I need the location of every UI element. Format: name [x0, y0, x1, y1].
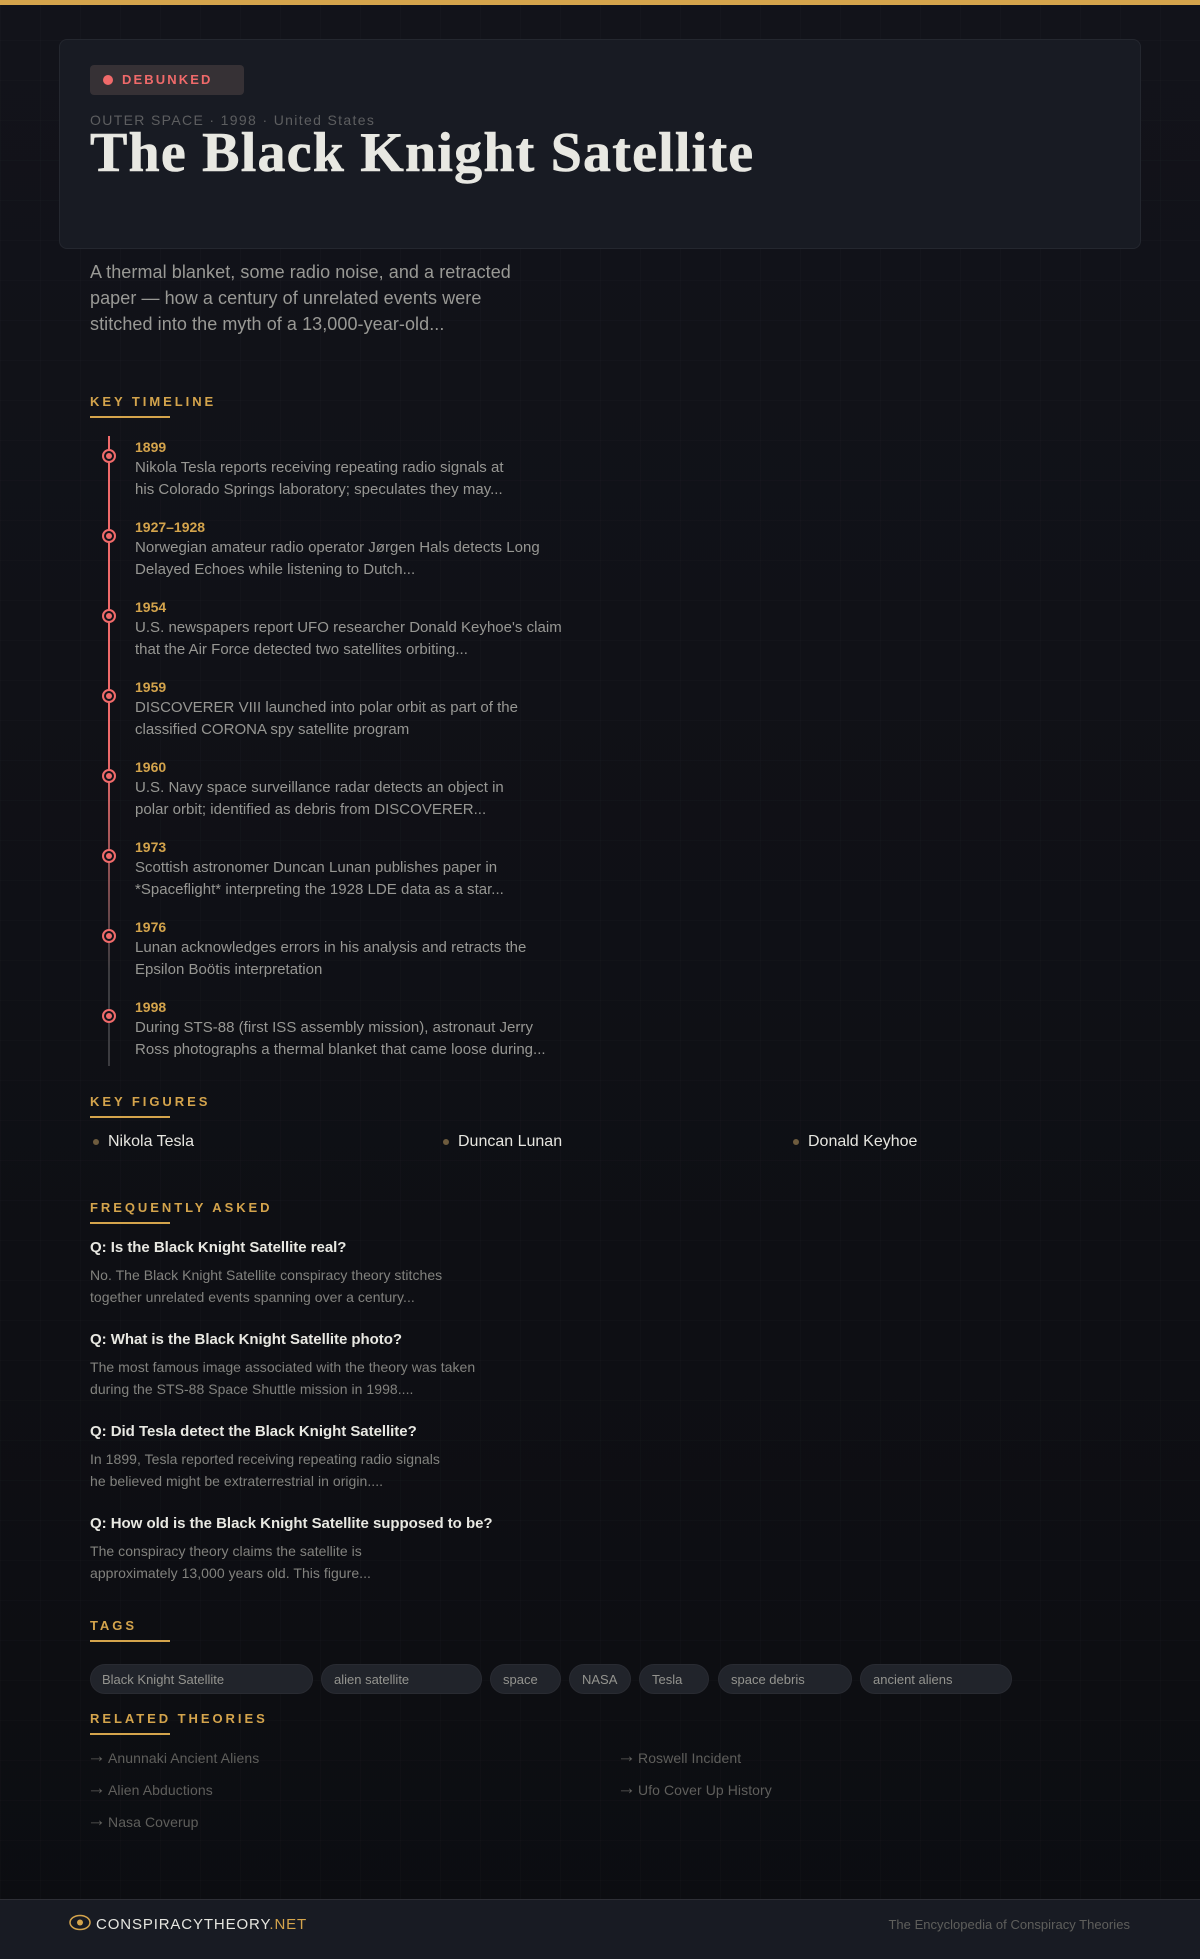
event: 1973: Scottish astronomer Duncan Lunan publishes paper in	[135, 859, 497, 876]
event: 1998: During STS-88 (first ISS assembly mission), astronaut Jerry	[135, 1019, 533, 1036]
icon: status dot	[103, 75, 113, 85]
footer brand: CONSPIRACYTHEORY.NET	[96, 1916, 307, 1933]
footer	[0, 1899, 1200, 1959]
related: Nasa Coverup: →	[87, 1810, 106, 1831]
tag: alien satellite: alien satellite	[334, 1672, 409, 1687]
event: 1927-1928: Norwegian amateur radio operator Jørgen Hals detects Long	[135, 539, 540, 556]
faq item 1	[90, 1239, 442, 1305]
event: 1927-1928: 1927–1928	[135, 519, 205, 535]
event: 1976	[102, 919, 526, 978]
faq item 4: approximately 13,000 years old. This figure...	[90, 1565, 371, 1581]
tag: Tesla: Tesla	[652, 1672, 682, 1687]
event: 1973: *Spaceflight* interpreting the 1928 LDE data as a star...	[135, 881, 504, 898]
faq item 4	[90, 1515, 493, 1581]
event: 1954: that the Air Force detected two satellites orbiting...	[135, 641, 468, 658]
faq item 4: Q: How old is the Black Knight Satellite supposed to be?	[90, 1515, 493, 1532]
tag: Black Knight Satellite	[90, 1664, 313, 1694]
faq item 3: Q: Did Tesla detect the Black Knight Satellite?	[90, 1423, 417, 1440]
event: 1959: classified CORONA spy satellite program	[135, 721, 409, 738]
faq item 3: In 1899, Tesla reported receiving repeating radio signals	[90, 1451, 440, 1467]
faq item 2	[90, 1331, 475, 1397]
tag: alien satellite	[321, 1664, 482, 1694]
related: Alien Abductions: Alien Abductions	[108, 1782, 213, 1798]
footer tagline: The Encyclopedia of Conspiracy Theories	[888, 1917, 1130, 1932]
timeline	[108, 436, 110, 1066]
heading: tags: TAGS	[90, 1618, 137, 1633]
tag: space debris: space debris	[731, 1672, 805, 1687]
related: Roswell Incident: →	[617, 1746, 636, 1767]
related: Ufo Cover Up History: Ufo Cover Up History	[638, 1782, 772, 1798]
faq item 1: Q: Is the Black Knight Satellite real?	[90, 1239, 346, 1256]
faq item 2: during the STS-88 Space Shuttle mission in 1998....	[90, 1381, 413, 1397]
event: 1976: Epsilon Boötis interpretation	[135, 961, 322, 978]
related: Nasa Coverup: Nasa Coverup	[108, 1814, 198, 1830]
event: 1976: Lunan acknowledges errors in his analysis and retracts the	[135, 939, 526, 956]
intro text: stitched into the myth of a 13,000-year-old...	[90, 314, 444, 334]
event: 1899: his Colorado Springs laboratory; speculates they may...	[135, 481, 503, 498]
event: 1954: 1954	[135, 599, 166, 615]
event: 1927-1928	[102, 519, 540, 578]
tag: ancient aliens: ancient aliens	[873, 1672, 952, 1687]
related: Roswell Incident: Roswell Incident	[638, 1750, 741, 1766]
panel: header	[59, 39, 1141, 249]
event: 1973: 1973	[135, 839, 166, 855]
tag: NASA	[569, 1664, 631, 1694]
intro text: A thermal blanket, some radio noise, and a retracted	[90, 262, 511, 282]
related: Ufo Cover Up History: →	[617, 1778, 636, 1799]
event: 1960: 1960	[135, 759, 166, 775]
event: 1960: polar orbit; identified as debris from DISCOVERER...	[135, 801, 486, 818]
intro text: paper — how a century of unrelated events were	[90, 288, 481, 308]
related: Roswell Incident	[617, 1746, 741, 1767]
event: 1954	[102, 599, 562, 658]
event: 1899	[102, 439, 504, 498]
tag: NASA: NASA	[582, 1672, 617, 1687]
tag: space	[490, 1664, 561, 1694]
top accent bar	[0, 0, 1200, 5]
faq item 4: The conspiracy theory claims the satellite is	[90, 1543, 362, 1559]
title: The Black Knight Satellite	[90, 122, 754, 184]
heading: frequently asked: FREQUENTLY ASKED	[90, 1200, 273, 1215]
event: 1998	[102, 999, 546, 1058]
event: 1899: Nikola Tesla reports receiving repeating radio signals at	[135, 459, 504, 476]
related: Anunnaki Ancient Aliens: Anunnaki Ancient Aliens	[108, 1750, 259, 1766]
related: Ufo Cover Up History	[617, 1778, 772, 1799]
badge: debunked	[90, 65, 244, 95]
icon: eye logo	[69, 1914, 91, 1930]
event: 1954: U.S. newspapers report UFO researcher Donald Keyhoe's claim	[135, 619, 562, 636]
related: Anunnaki Ancient Aliens: →	[87, 1746, 106, 1767]
event: 1959: DISCOVERER VIII launched into polar orbit as part of the	[135, 699, 518, 716]
badge label: DEBUNKED	[122, 72, 212, 87]
faq item 1: No. The Black Knight Satellite conspiracy theory stitches	[90, 1267, 442, 1283]
heading: key timeline: KEY TIMELINE	[90, 394, 216, 409]
faq item 2: Q: What is the Black Knight Satellite photo?	[90, 1331, 402, 1348]
event: 1973	[102, 839, 504, 898]
figure: Donald Keyhoe: Donald Keyhoe	[808, 1133, 917, 1150]
tag: Black Knight Satellite: Black Knight Satellite	[102, 1672, 224, 1687]
event: 1960: U.S. Navy space surveillance radar detects an object in	[135, 779, 504, 796]
related: Nasa Coverup	[87, 1810, 198, 1831]
faq item 1: together unrelated events spanning over a century...	[90, 1289, 415, 1305]
related: Anunnaki Ancient Aliens	[87, 1746, 259, 1767]
related: Alien Abductions	[87, 1778, 213, 1799]
event: 1960	[102, 759, 504, 818]
event: 1976: 1976	[135, 919, 166, 935]
heading: related theories: RELATED THEORIES	[90, 1711, 268, 1726]
figure: Duncan Lunan: Duncan Lunan	[458, 1133, 562, 1150]
tag: ancient aliens	[860, 1664, 1012, 1694]
faq item 2: The most famous image associated with the theory was taken	[90, 1359, 475, 1375]
category and date line: OUTER SPACE · 1998 · United States	[90, 112, 375, 128]
event: 1959	[102, 679, 518, 738]
intro text	[90, 262, 511, 334]
event: 1899: 1899	[135, 439, 166, 455]
tag: space: space	[503, 1672, 538, 1687]
related: Alien Abductions: →	[87, 1778, 106, 1799]
event: 1927-1928: Delayed Echoes while listening to Dutch...	[135, 561, 415, 578]
figure: Nikola Tesla: Nikola Tesla	[108, 1133, 194, 1150]
event: 1959: 1959	[135, 679, 166, 695]
tag: space debris	[718, 1664, 852, 1694]
event: 1998: Ross photographs a thermal blanket that came loose during...	[135, 1041, 546, 1058]
faq item 3	[90, 1423, 440, 1489]
event: 1998: 1998	[135, 999, 166, 1015]
heading: key figures: KEY FIGURES	[90, 1094, 210, 1109]
faq item 3: he believed might be extraterrestrial in origin....	[90, 1473, 383, 1489]
tag: Tesla	[639, 1664, 709, 1694]
